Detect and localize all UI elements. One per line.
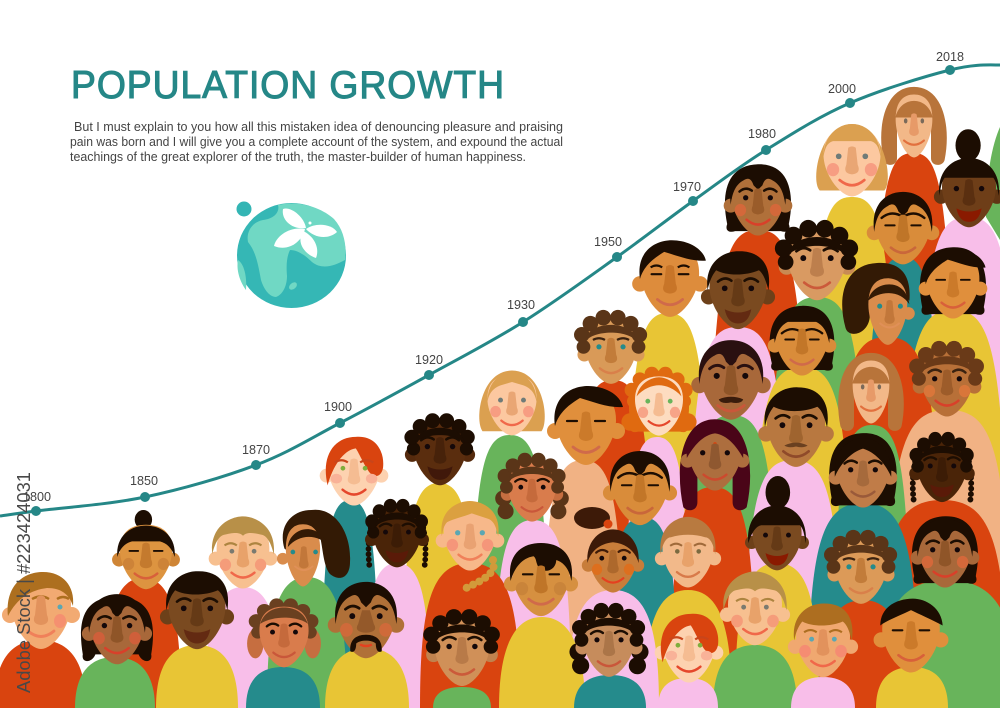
- person: woman with bob, yellow shirt: [898, 247, 1000, 708]
- person: girl with ponytail, pink shirt: [567, 507, 659, 708]
- person: curly-haired man, green shirt: [767, 220, 867, 708]
- timeline points and years: 1970: [673, 180, 701, 194]
- timeline points and years: 1900: [324, 400, 352, 414]
- person: red curly-haired woman, pink shirt: [621, 367, 697, 708]
- person: woman with braids, orange shirt: [877, 432, 1000, 708]
- person: woman with widow's peak, green shirt: [877, 516, 1000, 708]
- person: man with swept hair, peach shirt: [543, 386, 625, 708]
- person: curly-haired woman, teal shirt: [569, 603, 649, 708]
- person: man at far left, orange shirt: [0, 572, 86, 708]
- title: POPULATION GROWTH: [71, 64, 505, 107]
- timeline points and years: 1920: [415, 353, 443, 367]
- person: dark-skinned man, pink shirt: [688, 251, 788, 708]
- person: woman with widow's peak, orange shirt: [708, 164, 808, 708]
- person: red-haired woman, pink shirt: [655, 614, 723, 708]
- timeline points and years: 1850: [130, 474, 158, 488]
- person: frida-brow man, teal shirt: [603, 451, 677, 708]
- person: curly brown-haired woman, pink shirt: [495, 453, 571, 708]
- person: moustached brown man, green shirt: [687, 340, 777, 708]
- intro paragraph: pain was born and I will give you a complete account of the system, and expound the actual: [70, 135, 563, 149]
- person: frida-brow woman, yellow shirt: [752, 306, 852, 708]
- intro paragraph: teachings of the great explorer of the truth, the master-builder of human happiness.: [70, 150, 526, 164]
- person: blond woman: [807, 124, 897, 708]
- person: man with blond hair, yellow shirt: [644, 517, 732, 708]
- person: dark-skinned man, yellow shirt: [403, 413, 475, 708]
- timeline points and years: [23, 50, 964, 516]
- intro paragraph: But I must explain to you how all this mistaken idea of denouncing pleasure and praising: [74, 120, 563, 134]
- person: blond woman with braid, orange shirt: [420, 501, 520, 708]
- person: curly brown-haired man, orange shirt: [573, 310, 653, 708]
- person: green shirt edge right: [986, 127, 1000, 240]
- person: brown-haired woman: [871, 87, 955, 708]
- stock id caption: Adobe Stock | #223424031: [14, 472, 34, 693]
- person: red-haired man, teal shirt: [320, 437, 388, 708]
- person: man with brown hair, pink shirt: [788, 603, 858, 708]
- intro paragraph: [70, 120, 563, 164]
- timeline points and years: 1930: [507, 298, 535, 312]
- timeline points and years: 1980: [748, 127, 776, 141]
- person: woman with dark hair, green shirt: [267, 510, 350, 708]
- person: woman with bob, green shirt: [75, 594, 155, 708]
- timeline points and years: 2000: [828, 82, 856, 96]
- person: curly-haired man, orange shirt: [818, 530, 908, 708]
- timeline points and years: 1800: [23, 490, 51, 504]
- person: man with swept hair, yellow shirt: [499, 543, 585, 708]
- timeline points and years: 1870: [242, 443, 270, 457]
- person: braided dark woman, pink shirt: [364, 499, 430, 708]
- person: curly-haired man, peach shirt: [886, 341, 1000, 708]
- person: dark man, yellow shirt: [156, 571, 238, 708]
- person: long dark hair woman, orange shirt: [832, 263, 942, 708]
- person: man with curly black hair, green shirt: [423, 609, 500, 708]
- person: blond man, pink shirt: [205, 516, 281, 708]
- person: woman with bindi, orange shirt: [671, 419, 755, 708]
- person: man with moustache, pink shirt: [745, 387, 841, 708]
- person: man with swept hair, yellow shirt: [874, 599, 948, 708]
- person: blond man, green shirt: [713, 572, 797, 708]
- person: brown-haired woman, green shirt: [834, 353, 910, 708]
- timeline points and years: 1950: [594, 235, 622, 249]
- person: woman with black hair, teal shirt: [808, 433, 918, 708]
- person: frida-brow man, teal shirt: [865, 192, 941, 708]
- person: big-eared man, teal shirt: [246, 598, 321, 708]
- person: bun woman, yellow shirt: [735, 476, 819, 708]
- person: woman with bun top right: [916, 129, 1000, 708]
- person: man with topknot, orange shirt: [105, 510, 181, 708]
- growth curve: [0, 65, 1000, 516]
- icon: globe: [236, 202, 346, 308]
- person: man with black moustache, yellow shirt: [325, 582, 409, 708]
- person: blond woman, green shirt: [472, 371, 548, 708]
- timeline points and years: 2018: [936, 50, 964, 64]
- person: man with swept hair, yellow shirt: [626, 240, 710, 708]
